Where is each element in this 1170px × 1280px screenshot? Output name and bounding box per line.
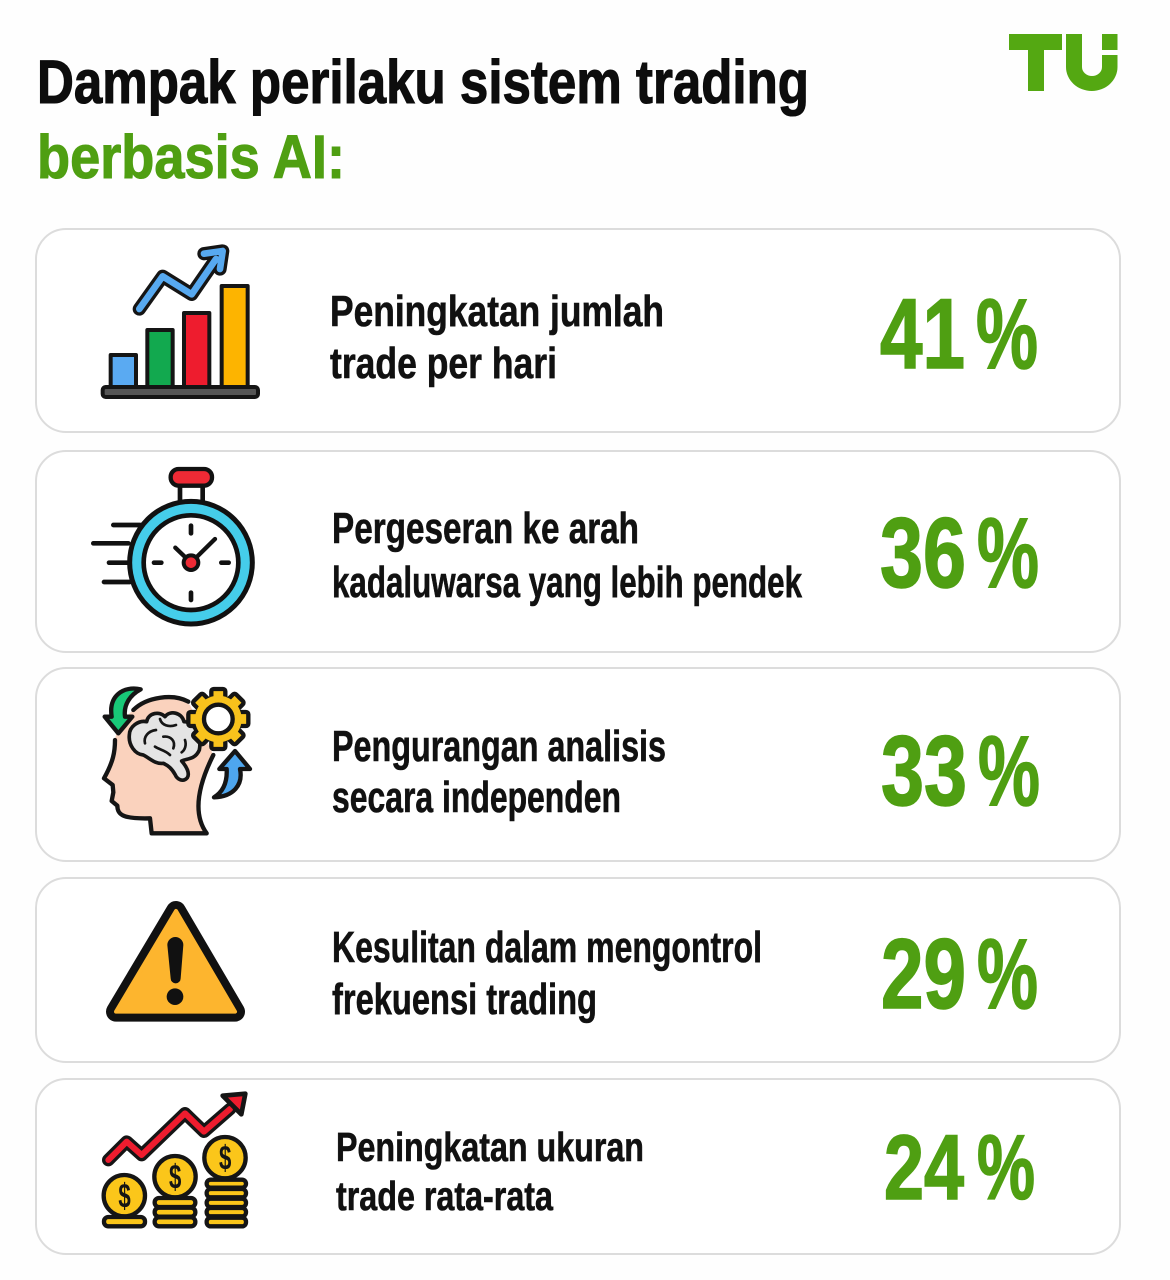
value: 36 [880,497,966,608]
icon: coins with red arrow: $ [219,1139,231,1177]
icon: coins with red arrow: $ [169,1158,181,1196]
label [336,1124,644,1219]
label: kadaluwarsa yang lebih pendek [332,558,802,607]
label [332,504,802,607]
label: Kesulitan dalam mengontrol [332,923,762,972]
value [880,497,1039,608]
label: secara independen [332,773,621,822]
icon: coins with red arrow: $ [118,1177,131,1215]
value: % [977,1117,1035,1219]
value: % [977,497,1039,608]
label: Pengurangan analisis [332,722,666,771]
panel: kesulitan mengontrol [36,878,1120,1062]
label [332,923,762,1024]
value: 33 [881,715,967,826]
value: % [977,918,1038,1029]
value: 24 [884,1117,964,1219]
title: Dampak perilaku sistem trading [37,48,809,116]
title [37,48,809,191]
value [884,1117,1035,1219]
label: Peningkatan ukuran [336,1124,644,1170]
panel: peningkatan ukuran trade [36,1079,1120,1254]
panel: pengurangan analisis [36,668,1120,861]
label: trade per hari [330,339,557,388]
label: frekuensi trading [332,975,597,1024]
label [332,722,666,822]
icon: stopwatch [93,469,252,624]
value [880,278,1038,389]
value: % [976,278,1038,389]
icon: warning triangle [116,911,235,1012]
label: trade rata-rata [336,1173,554,1219]
label: Pergeseran ke arah [332,504,639,553]
panel: peningkatan jumlah trade [36,229,1120,432]
label: Peningkatan jumlah [330,287,664,336]
icon: bar chart with rising arrow [103,251,258,397]
label [330,287,664,388]
icon: head with brain and gear [104,689,250,833]
value: % [978,715,1040,826]
value [881,715,1040,826]
panel: pergeseran kadaluwarsa [36,451,1120,652]
icon: coins with red arrow [104,1094,246,1226]
logo: TU [1009,34,1118,91]
value: 41 [880,278,965,389]
value: 29 [881,918,966,1029]
title: berbasis AI: [37,123,345,191]
